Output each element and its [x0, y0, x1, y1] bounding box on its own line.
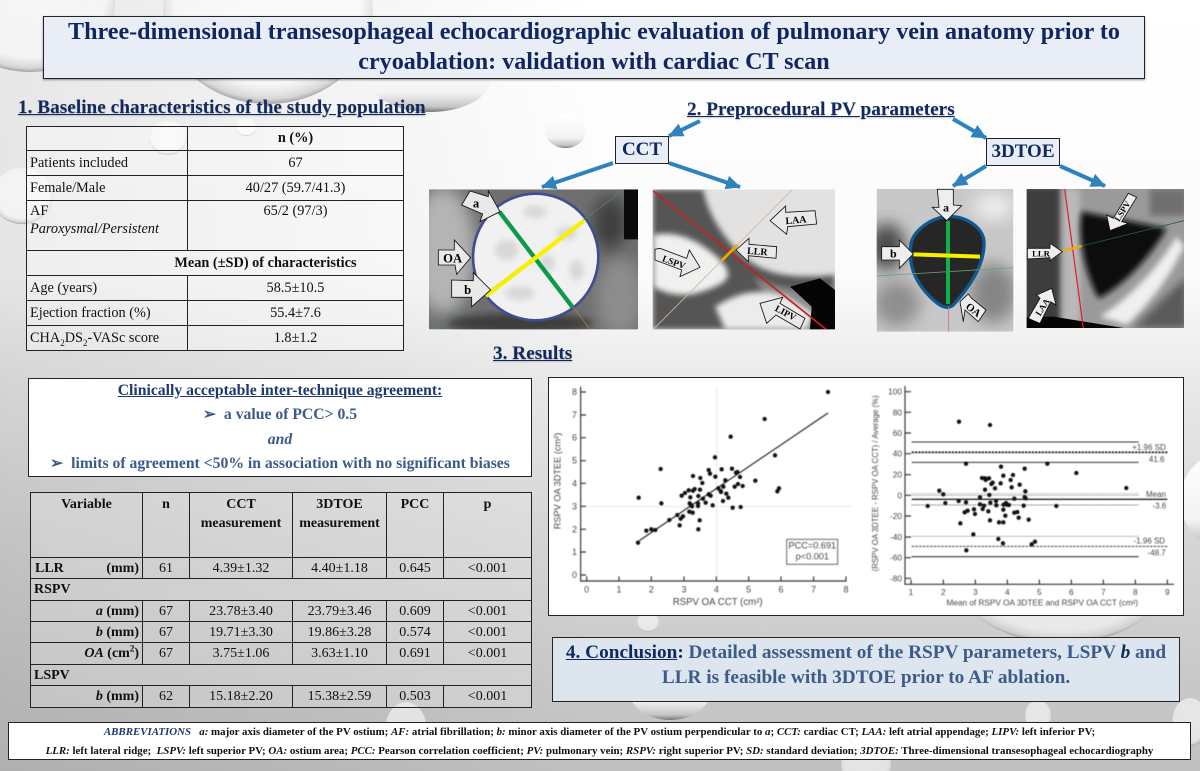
Bland-Altman plot: 9 — [1165, 587, 1170, 597]
Bland-Altman plot: (RSPV OA 3DTEE - RSPV OA CCT) / Average (%) — [871, 395, 880, 571]
label LLR — [1027, 243, 1062, 261]
Bland-Altman plot: 1 — [909, 587, 914, 597]
Bland-Altman plot: 0 — [897, 490, 902, 500]
box: agreement criteria: Clinically acceptable inter-technique agreement: — [118, 382, 442, 399]
box: abbreviations: ABBREVIATIONS a: major axis diameter of the PV ostium; AF: atrial fibrillation; b: minor axis diameter of the PV ostium perpendicular to a; CCT: cardiac CT; LAA: left atrial appendage; LIPV: left inferior PV; — [104, 726, 1095, 738]
table: baseline characteristics: 58.5±10.5 — [267, 280, 324, 296]
arrow: CCT to image b — [669, 163, 740, 187]
table: inter-technique measurements: 0.574 — [399, 624, 431, 640]
box: abbreviations: LLR: left lateral ridge; LSPV: left superior PV; OA: ostium area; PCC: Pearson correlation coefficient; PV: pulmonary vein; RSPV: right superior PV; SD: standard deviation; 3DTOE: Three-dimensional transesophageal echocardiography — [46, 745, 1153, 757]
arrow: heading to 3DTOE — [953, 119, 986, 138]
image: CCT long axis with left lateral ridge — [653, 189, 835, 329]
Bland-Altman plot: 7 — [1101, 587, 1106, 597]
title: cryoablation: validation with cardiac CT scan — [358, 48, 830, 74]
scatter plot: RSPV OA 3DTEE vs CCT: 8 — [572, 387, 577, 397]
title: Three-dimensional transesophageal echocardiographic evaluation of pulmonary vein anatomy prior to — [68, 19, 1120, 45]
scatter plot: RSPV OA 3DTEE vs CCT: 6 — [572, 433, 577, 443]
Bland-Altman plot: 100 — [888, 387, 902, 397]
table: baseline characteristics: 67 — [288, 154, 303, 170]
scatter plot: RSPV OA 3DTEE vs CCT: 0 — [572, 570, 577, 580]
scatter plot: RSPV OA 3DTEE vs CCT: 3 — [572, 501, 577, 511]
Bland-Altman plot: -80 — [890, 573, 902, 583]
label LLR — [736, 238, 777, 262]
scatter plot: RSPV OA 3DTEE vs CCT: 3 — [681, 585, 686, 595]
scatter plot: RSPV OA 3DTEE vs CCT: 0 — [584, 585, 589, 595]
table: inter-technique measurements: 4.40±1.18 — [311, 560, 368, 576]
Bland-Altman plot: Mean of RSPV OA 3DTEE and RSPV OA CCT (cm²) — [946, 599, 1138, 608]
Bland-Altman plot: -60 — [890, 553, 902, 563]
box: CCT — [615, 136, 669, 164]
box: agreement criteria: ➢ a value of PCC> 0.5 — [203, 406, 357, 423]
scatter plot: RSPV OA 3DTEE vs CCT: 5 — [572, 456, 577, 466]
statistics box — [787, 539, 838, 564]
table: inter-technique measurements: 3.63±1.10 — [311, 646, 368, 661]
table: inter-technique measurements: 67 — [159, 646, 173, 661]
table: inter-technique measurements: p — [484, 497, 491, 512]
box: agreement criteria: ➢ limits of agreement <50% in association with no significant biases — [50, 455, 510, 472]
scatter plot: RSPV OA 3DTEE vs CCT: 5 — [746, 585, 751, 595]
table: inter-technique measurements: 23.78±3.40 — [209, 604, 273, 618]
image: 3DTOE short axis of the PV ostium — [868, 189, 1017, 332]
table: inter-technique measurements: <0.001 — [468, 604, 507, 618]
label a: a — [943, 200, 949, 214]
Bland-Altman plot: -48.7 — [1148, 548, 1166, 557]
table: baseline characteristics: 1.8±1.2 — [274, 330, 317, 346]
table: inter-technique measurements: RSPV — [34, 582, 71, 597]
table: inter-technique measurements: 0.691 — [399, 646, 431, 661]
label LSPV: LSPV — [1112, 198, 1133, 223]
image: 3DTOE long axis with left lateral ridge — [1026, 189, 1184, 328]
statistics box: PCC=0.691 — [789, 541, 836, 551]
label a — [462, 191, 500, 222]
table: inter-technique measurements: 0.609 — [399, 604, 431, 618]
box: CCT: CCT — [622, 139, 662, 160]
table: baseline characteristics: Female/Male — [30, 180, 105, 196]
label b: b — [890, 247, 897, 261]
box: agreement criteria — [28, 378, 532, 477]
table: baseline characteristics: Age (years) — [30, 280, 97, 296]
Bland-Altman plot: 60 — [893, 428, 902, 438]
title — [43, 16, 1145, 79]
box: conclusion: 4. Conclusion: Detailed assessment of the RSPV parameters, LSPV b and — [566, 642, 1166, 663]
table: inter-technique measurements: 23.79±3.46 — [308, 604, 371, 618]
table: inter-technique measurements — [30, 492, 532, 708]
Bland-Altman plot: 4 — [1005, 587, 1010, 597]
Bland-Altman plot: 2 — [941, 587, 946, 597]
table: inter-technique measurements: 4.39±1.32 — [213, 560, 269, 576]
table: inter-technique measurements: measurement — [201, 516, 281, 531]
label LLR: LLR — [747, 246, 769, 258]
table: inter-technique measurements: measurement — [299, 516, 380, 531]
box: conclusion — [552, 637, 1180, 702]
label a — [932, 189, 962, 221]
Bland-Altman plot: 80 — [893, 407, 902, 417]
table: inter-technique measurements: 15.38±2.59 — [308, 689, 371, 704]
scatter plot: RSPV OA 3DTEE vs CCT: RSPV OA CCT (cm²) — [673, 597, 763, 608]
Bland-Altman plot: 41.6 — [1149, 455, 1165, 464]
heading: section 2: 2. Preprocedural PV parameters — [687, 99, 955, 120]
table: baseline characteristics: 40/27 (59.7/41.3) — [246, 180, 345, 196]
table: inter-technique measurements: 67 — [159, 624, 173, 640]
label LAA: LAA — [785, 214, 808, 227]
table: inter-technique measurements: 62 — [159, 689, 173, 704]
Bland-Altman plot: 40 — [893, 449, 902, 459]
heading: section 3: 3. Results — [493, 343, 572, 364]
panel: result charts — [548, 377, 1184, 616]
table: baseline characteristics: 55.4±7.6 — [270, 304, 321, 320]
scatter plot: RSPV OA 3DTEE vs CCT: 2 — [649, 585, 654, 595]
label LIPV: LIPV — [773, 304, 797, 324]
box: agreement criteria: and — [268, 431, 292, 448]
label LSPV — [655, 248, 700, 277]
Bland-Altman plot: 20 — [893, 470, 902, 480]
Bland-Altman plot: +1.96 SD — [1132, 443, 1166, 452]
table: inter-technique measurements: 15.18±2.20 — [209, 689, 273, 704]
table: inter-technique measurements: b (mm) — [96, 624, 139, 640]
scatter plot: RSPV OA 3DTEE vs CCT: 8 — [843, 585, 848, 595]
scatter plot: RSPV OA 3DTEE vs CCT: 7 — [811, 585, 816, 595]
label b: b — [464, 283, 471, 297]
table: inter-technique measurements: 19.71±3.30 — [209, 624, 273, 640]
Bland-Altman plot: -20 — [890, 511, 902, 521]
Bland-Altman plot: 3 — [973, 587, 978, 597]
table: inter-technique measurements: 3DTOE — [316, 497, 363, 512]
statistics box: p<0.001 — [796, 551, 829, 561]
scatter plot: RSPV OA 3DTEE vs CCT: RSPV OA 3DTEE (cm²) — [553, 433, 563, 529]
table: inter-technique measurements: <0.001 — [468, 689, 507, 704]
table: baseline characteristics: Paroxysmal/Persistent — [30, 221, 159, 237]
arrow: heading to CCT — [669, 121, 700, 136]
label OA — [438, 240, 471, 274]
arrow: CCT to image a — [542, 163, 613, 187]
box: abbreviations — [8, 722, 1191, 760]
table: inter-technique measurements: a (mm) — [96, 604, 139, 618]
label LIPV — [760, 297, 805, 329]
arrow: 3DTOE to image a — [953, 166, 986, 186]
Bland-Altman plot: -1.96 SD — [1134, 537, 1165, 546]
table: baseline characteristics: AF — [30, 203, 48, 219]
table: baseline characteristics: Patients included — [30, 154, 128, 170]
table: baseline characteristics: Ejection fraction (%) — [30, 304, 151, 320]
scatter plot: RSPV OA 3DTEE vs CCT — [553, 387, 852, 608]
scatter plot: RSPV OA 3DTEE vs CCT: 1 — [572, 547, 577, 557]
scatter plot: RSPV OA 3DTEE vs CCT: 4 — [572, 478, 577, 488]
table: baseline characteristics: Mean (±SD) of characteristics — [174, 254, 357, 270]
table: inter-technique measurements: 61 — [159, 560, 173, 576]
table: inter-technique measurements: <0.001 — [468, 624, 507, 640]
table: baseline characteristics — [26, 126, 404, 351]
label OA: OA — [963, 301, 983, 320]
table: inter-technique measurements: OA (cm2) — [84, 643, 139, 661]
table: inter-technique measurements: PCC — [401, 497, 429, 512]
scatter plot: RSPV OA 3DTEE vs CCT: 2 — [572, 524, 577, 534]
Bland-Altman plot: 6 — [1069, 587, 1074, 597]
box: conclusion: LLR is feasible with 3DTOE prior to AF ablation. — [662, 667, 1070, 688]
image: CCT short axis of the PV ostium — [429, 189, 638, 330]
table: inter-technique measurements: 0.645 — [399, 560, 431, 576]
label LSPV: LSPV — [661, 254, 687, 272]
table: inter-technique measurements: Variable — [61, 497, 112, 512]
label LAA — [770, 206, 817, 234]
arrow: 3DTOE to image b — [1060, 166, 1105, 186]
scatter plot: RSPV OA 3DTEE vs CCT: 7 — [572, 410, 577, 420]
scatter plot: RSPV OA 3DTEE vs CCT: 6 — [778, 585, 783, 595]
label OA: OA — [443, 252, 463, 266]
label LAA — [1028, 288, 1056, 323]
table: inter-technique measurements: LSPV — [34, 668, 70, 682]
label b — [882, 240, 913, 268]
scatter plot: RSPV OA 3DTEE vs CCT: 1 — [616, 585, 621, 595]
Bland-Altman plot: Mean — [1146, 490, 1166, 499]
table: inter-technique measurements: 3.75±1.06 — [213, 646, 269, 661]
scatter plot: RSPV OA 3DTEE vs CCT: 4 — [714, 585, 719, 595]
box: 3DTOE — [986, 138, 1060, 166]
measurement images and arrows — [429, 117, 1184, 332]
Bland-Altman plot: 8 — [1133, 587, 1138, 597]
box: 3DTOE: 3DTOE — [991, 141, 1054, 162]
table: baseline characteristics: CHA2DS2-VASc score — [30, 330, 159, 347]
table: inter-technique measurements: CCT — [226, 497, 256, 512]
table: baseline characteristics: 65/2 (97/3) — [264, 203, 327, 219]
Bland-Altman plot — [871, 386, 1174, 608]
Bland-Altman plot: -40 — [890, 532, 902, 542]
Bland-Altman plot: 5 — [1037, 587, 1042, 597]
table: inter-technique measurements: <0.001 — [468, 646, 507, 661]
table: inter-technique measurements: LLR — [35, 560, 64, 576]
heading: section 1: 1. Baseline characteristics of the study population — [18, 97, 426, 118]
label OA — [960, 294, 986, 322]
table: baseline characteristics: n (%) — [278, 130, 313, 146]
label LAA: LAA — [1033, 296, 1052, 318]
table: inter-technique measurements: n — [162, 497, 170, 512]
table: inter-technique measurements: (mm) — [106, 560, 139, 576]
label b — [452, 273, 491, 307]
Bland-Altman plot: -3.6 — [1152, 502, 1167, 511]
label LLR: LLR — [1032, 249, 1051, 259]
table: inter-technique measurements: b (mm) — [96, 689, 139, 704]
table: inter-technique measurements: 19.86±3.28 — [308, 624, 371, 640]
table: inter-technique measurements: 0.503 — [399, 689, 431, 704]
table: inter-technique measurements: <0.001 — [468, 560, 507, 576]
table: inter-technique measurements: 67 — [159, 604, 173, 618]
label LSPV — [1107, 193, 1137, 231]
label a: a — [473, 197, 480, 211]
